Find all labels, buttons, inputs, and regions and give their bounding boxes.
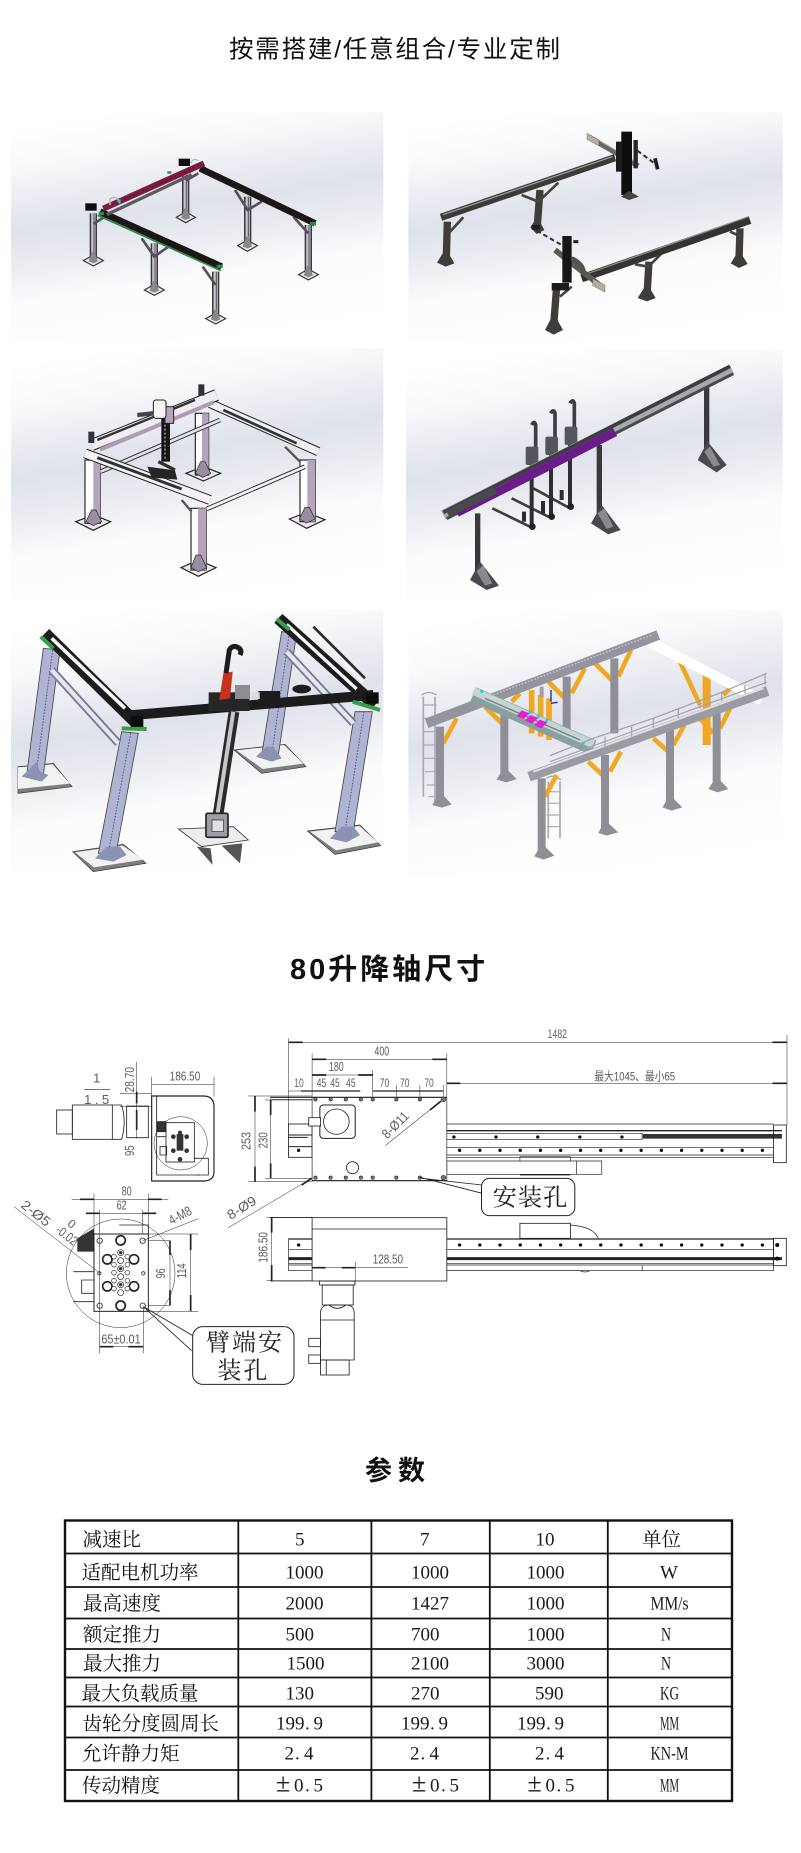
dimension lines: top dimensions: 70 (380, 1076, 389, 1090)
row: max load: 270 (411, 1684, 440, 1704)
row: transmission accuracy: ± (528, 1768, 542, 1798)
row: gear pitch circumference: 199.9 (276, 1714, 323, 1734)
heading: 80 lift axis dimensions: 80升降轴尺寸 (290, 953, 488, 986)
panel: gantry model 6 (large steel structure with orange braces) (408, 610, 783, 875)
row: transmission accuracy: 0.5 (430, 1776, 459, 1796)
drawing: arm-end plate view: 65±0.01 (101, 1331, 141, 1346)
row: max thrust: 2100 (411, 1654, 449, 1674)
row: transmission accuracy: 0.5 (294, 1776, 323, 1796)
drawing: arm-end plate view (14, 1184, 198, 1353)
row: rated thrust: 1000 (526, 1624, 564, 1646)
row: motor power (82, 1562, 678, 1584)
row: reduction ratio: 单位 (642, 1529, 681, 1551)
row: gear pitch circumference: MM (660, 1714, 679, 1734)
callout: mounting holes: 安装孔 (493, 1184, 567, 1211)
drawing: left views, motor end and arm-end plate (14, 1062, 312, 1385)
row: transmission accuracy: 传动精度 (82, 1775, 160, 1797)
row: rated thrust: N (661, 1624, 671, 1646)
drawing: arm-end plate view: 4-M8 (166, 1203, 194, 1228)
row: gear pitch circumference: 199.9 (517, 1714, 564, 1734)
row: allowable static moment: KN-M (650, 1744, 689, 1764)
row: gear pitch circumference (82, 1713, 679, 1735)
callout: arm-end mounting holes: 臂端安 (206, 1330, 284, 1357)
row: max load: KG (660, 1684, 679, 1704)
row: reduction ratio: 减速比 (82, 1529, 141, 1551)
callout: arm-end mounting holes: 装孔 (217, 1358, 269, 1385)
row: max thrust: 最大推力 (83, 1653, 161, 1675)
dimension lines: top dimensions: 最大1045、最小65 (594, 1069, 675, 1083)
row: transmission accuracy: ± (412, 1768, 426, 1798)
panel: gantry model 1 (two rails, red cross beam) (11, 112, 383, 342)
drawing: main linear axis views with dimensions (270, 1027, 787, 1375)
row: max speed: 最高速度 (83, 1593, 161, 1615)
row: allowable static moment: 允许静力矩 (82, 1743, 180, 1765)
drawing: motor side view: 28.70 (122, 1067, 137, 1092)
title: customization heading: 按需搭建/任意组合/专业定制 (229, 36, 562, 64)
row: motor power: 1000 (526, 1562, 564, 1584)
dimension lines: top dimensions: 45 (346, 1076, 356, 1090)
dimension lines: 253, 230, 186.50, 8-Ø9: 186.50 (255, 1232, 270, 1263)
row: transmission accuracy: MM (660, 1776, 679, 1796)
dimension lines: top dimensions: 45 (330, 1076, 340, 1090)
row: motor power: 1000 (286, 1562, 324, 1584)
row: gear pitch circumference: 齿轮分度圆周长 (82, 1713, 219, 1735)
row: reduction ratio: 10 (536, 1530, 554, 1550)
row: max thrust: 3000 (526, 1654, 564, 1674)
row: max speed: MM/s (650, 1594, 688, 1614)
row: gear pitch circumference: 199.9 (401, 1714, 448, 1734)
drawing: motor side view: 1 (93, 1071, 100, 1086)
dimension lines: top dimensions: 180 (329, 1059, 344, 1074)
row: max load: 590 (535, 1684, 564, 1704)
row: rated thrust: 700 (411, 1624, 440, 1646)
table grid lines (65, 1520, 732, 1801)
dimension lines: top dimensions (270, 1027, 787, 1127)
drawing: arm-end plate view: -0.02 (53, 1222, 81, 1248)
drawing: motor side view: 186.50 (170, 1069, 200, 1084)
dimension lines: 253, 230, 186.50, 8-Ø9: 253 (239, 1132, 254, 1150)
drawing: front view rail and motor: 128.50 (373, 1252, 403, 1267)
dimension lines: top dimensions: 45 (317, 1076, 326, 1090)
row: reduction ratio (82, 1529, 681, 1551)
row: rated thrust: 500 (286, 1624, 314, 1646)
panel: gantry model 5 (close-up gantry with red Z axis) (11, 610, 383, 873)
row: allowable static moment: 2.4 (284, 1744, 314, 1764)
drawing: arm-end plate view: 114 (174, 1263, 189, 1278)
row: max thrust: N (661, 1654, 671, 1674)
row: reduction ratio: 5 (295, 1530, 304, 1550)
row: motor power: W (660, 1562, 678, 1584)
row: max load (82, 1683, 679, 1705)
panel: gantry model 4 (single rail with purple carriage) (406, 350, 783, 600)
drawing: motor side view: 1 . 5 (84, 1092, 109, 1107)
callout: mounting holes (420, 1177, 575, 1216)
drawing: motor side view: 95 (122, 1145, 137, 1156)
row: max speed: 1427 (411, 1594, 449, 1614)
drawing: top view rail: 8-Ø11 (379, 1108, 412, 1141)
row: max load: 130 (286, 1684, 314, 1704)
row: rated thrust: 额定推力 (83, 1624, 161, 1646)
heading: parameters: 参数 (365, 1456, 431, 1486)
dimension lines: top dimensions: 1482 (548, 1027, 567, 1041)
dimension lines: top dimensions: 70 (400, 1076, 410, 1090)
dimension lines: top dimensions: 10 (294, 1076, 304, 1090)
table: parameter specifications (65, 1520, 732, 1801)
row: max speed: 1000 (526, 1594, 564, 1614)
drawing: arm-end plate view: 62 (117, 1197, 127, 1212)
panel: gantry model 2 (two long dark rails with robots) (408, 112, 783, 342)
drawing: arm-end plate view: 80 (122, 1184, 132, 1199)
drawing: arm-end plate view: 96 (153, 1268, 168, 1278)
dimension lines: top dimensions: 70 (424, 1076, 434, 1090)
drawing: top view rail (270, 1097, 786, 1181)
drawing: motor side view (57, 1062, 214, 1181)
row: rated thrust (83, 1624, 671, 1646)
drawing: arm-end plate view: 0 (65, 1216, 79, 1232)
row: motor power: 适配电机功率 (82, 1562, 199, 1584)
dimension lines: 253, 230, 186.50, 8-Ø9: 8-Ø9 (224, 1193, 259, 1223)
row: transmission accuracy: ± (276, 1768, 290, 1798)
row: max thrust (83, 1653, 671, 1675)
row: allowable static moment (82, 1743, 689, 1765)
row: max speed: 2000 (286, 1594, 324, 1614)
dimension lines: 253, 230, 186.50, 8-Ø9 (224, 1096, 312, 1281)
callout: arm-end mounting holes (143, 1307, 294, 1385)
panel: gantry model 3 (four-post frame) (11, 348, 383, 600)
dimension lines: 253, 230, 186.50, 8-Ø9: 230 (255, 1132, 270, 1148)
row: max load: 最大负载质量 (82, 1683, 199, 1705)
dimension lines: top dimensions: 400 (374, 1044, 389, 1059)
row: allowable static moment: 2.4 (410, 1744, 440, 1764)
row: allowable static moment: 2.4 (535, 1744, 564, 1764)
row: transmission accuracy: 0.5 (546, 1776, 574, 1796)
row: max speed (83, 1593, 688, 1615)
row: reduction ratio: 7 (420, 1530, 430, 1550)
row: motor power: 1000 (411, 1562, 449, 1584)
drawing: front view rail and motor (270, 1218, 786, 1375)
row: transmission accuracy (82, 1768, 679, 1798)
row: max thrust: 1500 (286, 1654, 324, 1674)
drawing: arm-end plate view: 2-Ø5 (18, 1197, 54, 1230)
